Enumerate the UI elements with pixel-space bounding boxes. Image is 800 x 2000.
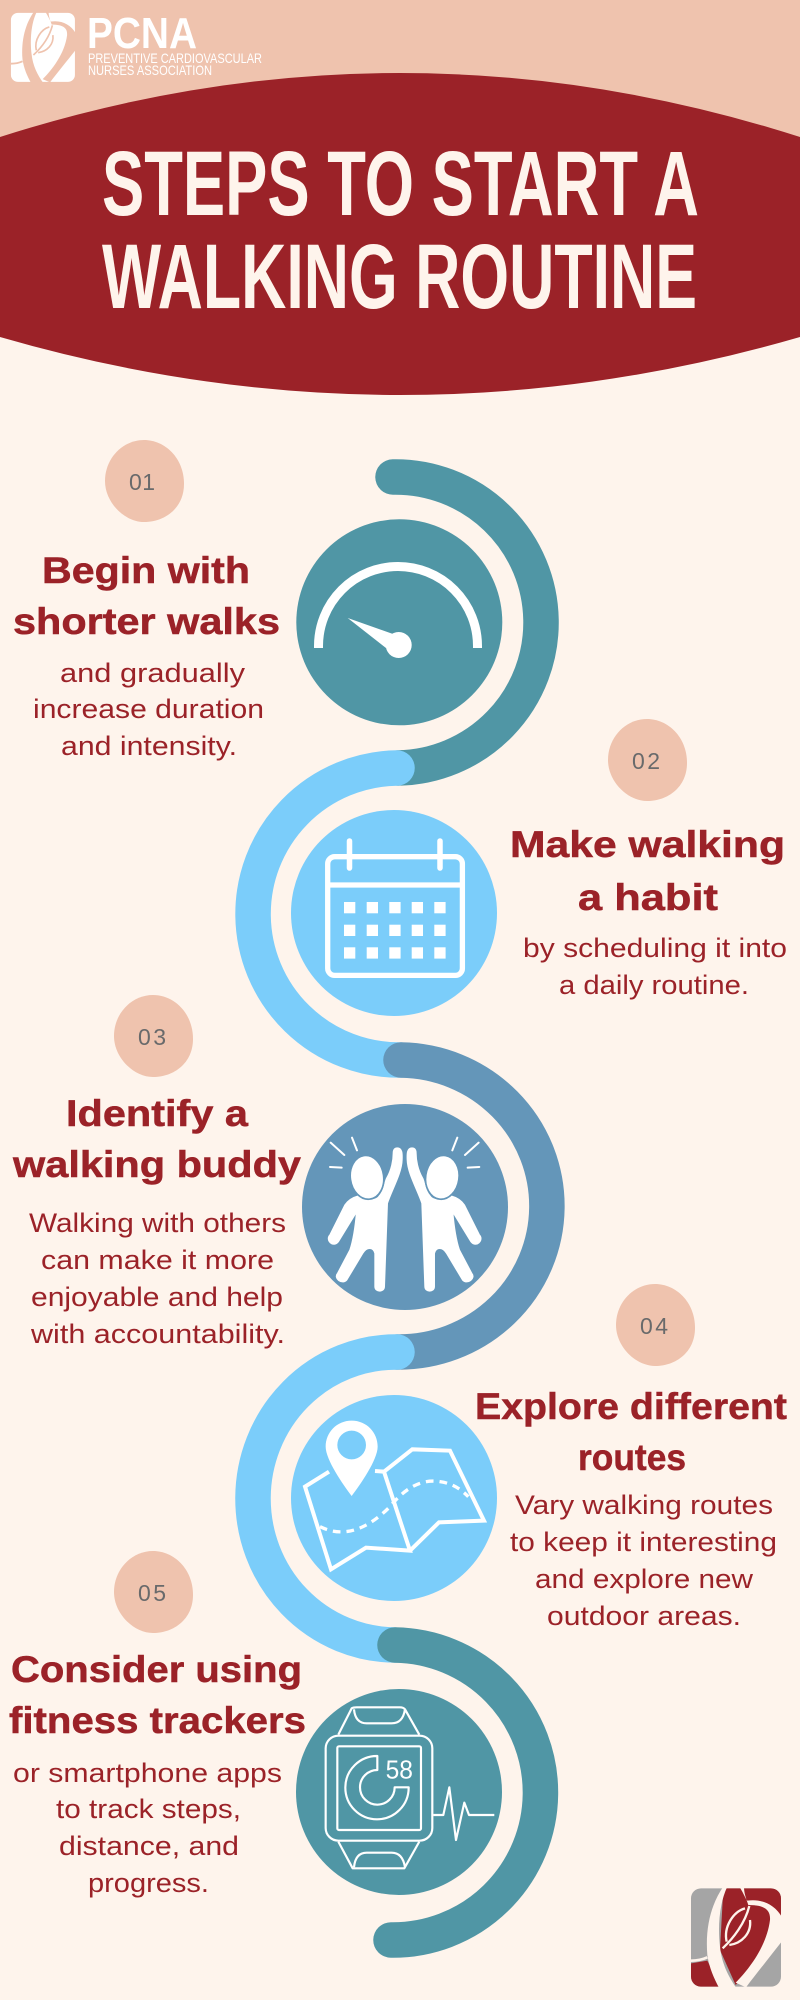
panel: step 5 (9, 1551, 502, 1898)
body step 1: and gradually (60, 658, 246, 688)
number badge 01 (105, 440, 184, 522)
panel: step 4 (291, 1284, 787, 1631)
icon: PCNA heart mark (11, 12, 75, 83)
panel: step 3 (12, 995, 508, 1349)
body step 3: enjoyable and help (31, 1282, 283, 1312)
connecting arc 2 (253, 768, 401, 1060)
heading step 2: a habit (578, 877, 718, 918)
heading step 1 (13, 550, 280, 642)
body step 5: or smartphone apps (13, 1758, 282, 1788)
body step 5: to track steps, (56, 1794, 241, 1824)
panel: step 2 (291, 719, 787, 1016)
body step 1: and intensity. (61, 731, 237, 761)
body step 1: increase duration (33, 694, 264, 724)
icon: speedometer (296, 519, 502, 725)
heading step 1: shorter walks (13, 601, 280, 642)
heading step 2: Make walking (510, 824, 785, 865)
body step 2 (523, 933, 787, 1000)
number badge 05 (114, 1551, 193, 1633)
body step 4: Vary walking routes (515, 1490, 773, 1520)
heading step 5: Consider using (11, 1649, 302, 1690)
body step 5 (13, 1758, 282, 1898)
number badge 03 (114, 995, 193, 1077)
icon: map with location pin (291, 1395, 497, 1601)
number badge 03: 03 (138, 1024, 166, 1050)
right figure (407, 1138, 481, 1291)
heading step 1: Begin with (42, 550, 250, 591)
heading step 5: fitness trackers (9, 1700, 306, 1741)
body step 3: Walking with others (29, 1208, 286, 1238)
body step 3 (29, 1208, 286, 1349)
body step 4: to keep it interesting (510, 1527, 777, 1557)
heading step 3 (12, 1093, 301, 1185)
heading step 4: routes (578, 1437, 686, 1478)
logo: PCNA mark and name: NURSES ASSOCIATION (88, 62, 212, 78)
body step 5: distance, and (59, 1831, 239, 1861)
heading step 4: Explore different (475, 1386, 787, 1427)
body step 2: by scheduling it into (523, 933, 787, 963)
connecting arc 5 (391, 1645, 540, 1940)
connecting arc 3 (397, 1060, 547, 1352)
icon: calendar (291, 810, 497, 1016)
number badge 01: 01 (129, 469, 155, 495)
icon: smartwatch with heartbeat (296, 1689, 502, 1895)
icon: two people high-fiving (302, 1104, 508, 1310)
connecting arc 4 (253, 1352, 397, 1645)
body step 1 (33, 658, 264, 761)
body step 4: outdoor areas. (547, 1601, 741, 1631)
number badge 04 (616, 1284, 695, 1366)
heading step 3: Identify a (66, 1093, 248, 1134)
logo: PCNA mark and name (11, 9, 262, 83)
number badge 04: 04 (640, 1313, 668, 1339)
left figure (328, 1138, 402, 1291)
body step 3: with accountability. (30, 1319, 285, 1349)
number badge 02 (608, 719, 687, 801)
panel: step 1 (13, 440, 502, 761)
watch readout: 58 (386, 1754, 413, 1784)
heading step 3: walking buddy (12, 1144, 301, 1185)
number badge 05: 05 (138, 1580, 166, 1606)
body step 4: and explore new (535, 1564, 754, 1594)
body step 3: can make it more (41, 1245, 274, 1275)
heading step 2 (510, 824, 785, 918)
header band: red curved banner (0, 73, 800, 395)
header band: peach top (0, 0, 800, 145)
logo: PCNA mark, bottom right (691, 1887, 782, 1988)
number badge 02: 02 (632, 748, 660, 774)
connecting arc 1 (393, 477, 541, 768)
logo subtitle: PREVENTIVE CARDIOVASCULAR (88, 50, 262, 66)
title (102, 133, 699, 328)
body step 5: progress. (88, 1868, 209, 1898)
heading step 5 (9, 1649, 306, 1741)
body step 2: a daily routine. (559, 970, 749, 1000)
heading step 4 (475, 1386, 787, 1478)
body step 4 (510, 1490, 777, 1631)
logo wordmark: PCNA (87, 9, 197, 58)
